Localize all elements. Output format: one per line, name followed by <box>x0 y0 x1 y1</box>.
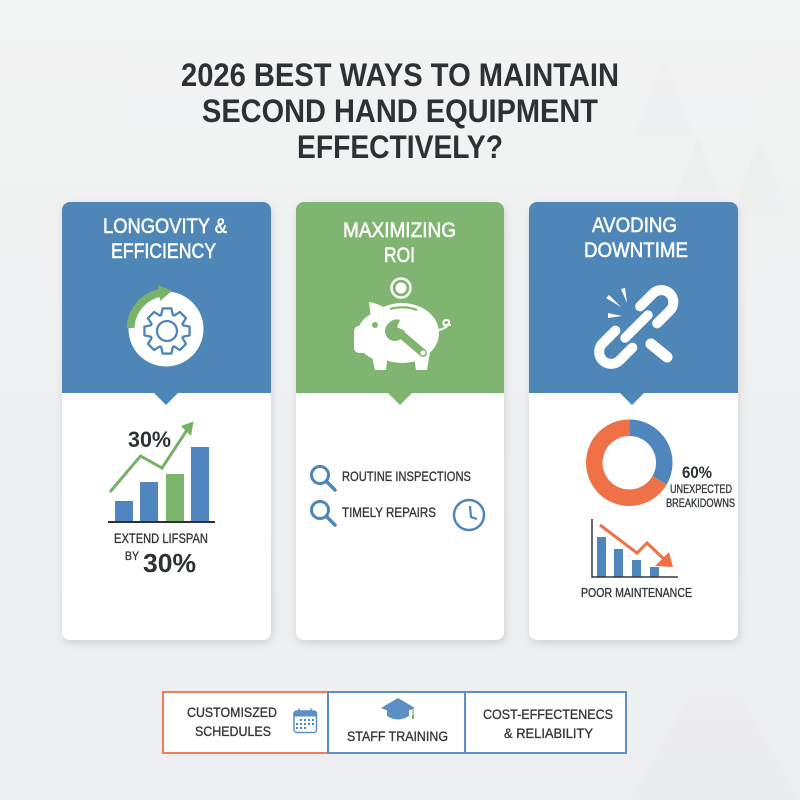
icon: piggy bank with wrench <box>354 278 451 370</box>
heading: avoiding downtime: DOWNTIME <box>584 239 688 262</box>
icon: clock <box>454 500 484 530</box>
item: timely repairs: TIMELY REPAIRS <box>342 504 436 520</box>
cell: customized schedules: SCHEDULES <box>195 723 271 739</box>
panel header: longevity <box>62 202 271 405</box>
panel: avoiding downtime <box>529 202 738 640</box>
heading: maximizing ROI <box>343 219 456 267</box>
cell: cost-effectiveness and reliability <box>465 692 626 753</box>
panel: maximizing ROI <box>296 202 504 640</box>
panel header: ROI <box>296 202 504 405</box>
title: 2026 BEST WAYS TO MAINTAIN <box>181 57 619 93</box>
cell: customized schedules <box>163 692 328 753</box>
label: 60% unexpected breakdowns: BREAKIDOWNS <box>666 496 735 510</box>
icon: gear with cycle arrow <box>128 285 204 366</box>
label: 60% unexpected breakdowns: 60% <box>682 463 712 482</box>
icon: broken chain link <box>594 285 678 369</box>
heading: longevity and efficiency: EFFICIENCY <box>111 240 216 263</box>
cell: staff training: STAFF TRAINING <box>347 728 448 744</box>
heading: avoiding downtime: AVODING <box>592 214 677 237</box>
panel header: downtime <box>529 202 738 405</box>
cell: cost-effectiveness and reliability: COST-EFFECTENECS <box>483 706 613 722</box>
label: poor maintenance: POOR MAINTENANCE <box>581 585 692 600</box>
bar chart: lifespan growth: 30% <box>128 427 171 452</box>
icon: calendar <box>294 708 316 732</box>
cell: staff training <box>328 692 465 753</box>
bar chart: lifespan growth <box>108 422 215 523</box>
title: SECOND HAND EQUIPMENT <box>202 93 598 129</box>
item: routine inspections <box>312 466 471 490</box>
text: extend lifespan by 30%: 30% <box>143 548 196 578</box>
cell: cost-effectiveness and reliability: & RELIABILITY <box>504 725 594 741</box>
text: extend lifespan by 30%: EXTEND LIFSPAN <box>114 530 208 546</box>
label: 60% unexpected breakdowns: UNEXPECTED <box>670 482 732 496</box>
heading: maximizing ROI: ROI <box>384 244 415 267</box>
bar chart: poor maintenance decline <box>592 519 678 577</box>
bottom strip <box>163 692 626 753</box>
panel: longevity and efficiency <box>62 202 271 640</box>
text: extend lifespan by 30% <box>114 530 208 578</box>
item: routine inspections: ROUTINE INSPECTIONS <box>342 468 471 484</box>
heading: avoiding downtime <box>584 214 688 262</box>
heading: maximizing ROI: MAXIMIZING <box>343 219 456 242</box>
item: timely repairs <box>312 502 436 525</box>
heading: longevity and efficiency <box>103 215 227 263</box>
donut chart: unexpected breakdowns <box>594 428 664 498</box>
label: 60% unexpected breakdowns <box>666 463 735 510</box>
title <box>181 57 619 165</box>
title: EFFECTIVELY? <box>297 129 503 165</box>
icon: graduation cap <box>381 698 415 720</box>
cell: customized schedules: CUSTOMISZED <box>187 704 277 720</box>
text: extend lifespan by 30%: BY <box>125 549 139 563</box>
heading: longevity and efficiency: LONGOVITY & <box>103 215 227 238</box>
